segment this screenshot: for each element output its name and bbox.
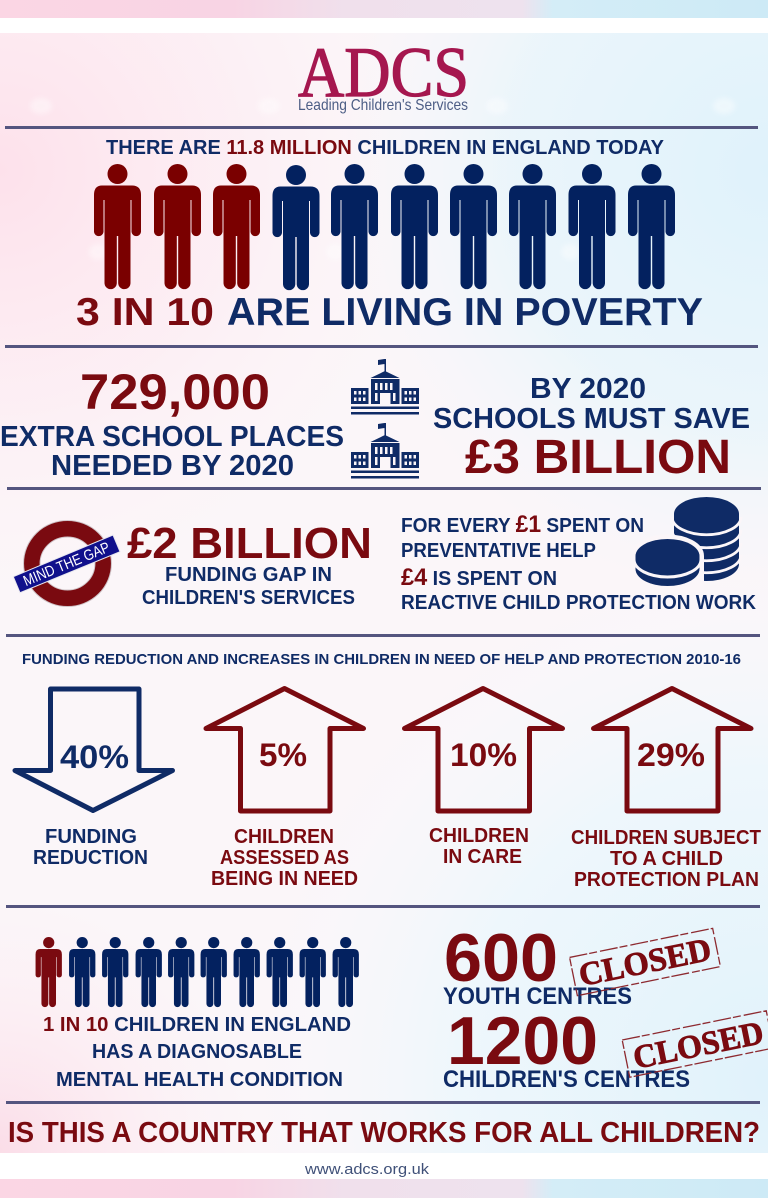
text: mental health: HAS A DIAGNOSABLE <box>92 1041 302 1063</box>
logo: ADCS: Leading Children's Services <box>298 97 468 114</box>
stat: 2 billion funding gap <box>127 519 372 609</box>
text: preventative vs reactive spend: PREVENTATIVE HELP <box>401 540 596 562</box>
text: preventative vs reactive spend: £4 IS SPENT ON <box>401 564 557 591</box>
stat: 1200 children's centres: CHILDREN'S CENTRES <box>443 1066 690 1093</box>
panel: children in care arrow <box>404 688 562 868</box>
logo: ADCS: ADCS <box>298 34 469 112</box>
website url: www.adcs.org.uk <box>304 1162 430 1178</box>
panel: funding reduction arrow: FUNDING <box>45 826 137 848</box>
stat: schools must save 3 billion: SCHOOLS MUST SAVE <box>433 403 750 435</box>
text: preventative vs reactive spend <box>401 511 757 614</box>
panel: children in care arrow: CHILDREN <box>429 825 529 847</box>
top decorative band <box>0 0 768 18</box>
stamp: closed youth centres: CLOSED <box>576 932 714 994</box>
panel: children in need arrow <box>206 688 364 890</box>
stat: 729,000 school places <box>0 364 344 482</box>
pictogram: 3 in 10 children <box>94 164 675 290</box>
text: mental health: 1 IN 10 CHILDREN IN ENGLAND <box>43 1014 351 1036</box>
panel: child protection plan arrow: 29% <box>637 737 705 773</box>
heading: funding reduction and increases: FUNDING REDUCTION AND INCREASES IN CHILDREN IN NEED OF HELP AND PROTECTION 2010-16 <box>22 651 741 668</box>
stat: schools must save 3 billion <box>433 373 750 484</box>
panel: child protection plan arrow: PROTECTION PLAN <box>574 869 759 891</box>
text: mental health <box>43 1014 351 1091</box>
stamp: closed children's centres: CLOSED <box>630 1015 767 1077</box>
stat: 1200 children's centres <box>443 1003 690 1093</box>
heading: 11.8 million children: THERE ARE 11.8 MILLION CHILDREN IN ENGLAND TODAY <box>106 137 665 159</box>
icon: mind the gap roundel: MIND THE GAP <box>21 539 112 590</box>
panel: child protection plan arrow <box>571 688 761 891</box>
panel: children in need arrow: CHILDREN <box>234 826 334 848</box>
stat: schools must save 3 billion: £3 BILLION <box>465 431 731 484</box>
stat: 600 youth centres <box>443 920 632 1010</box>
panel: child protection plan arrow: TO A CHILD <box>610 848 723 870</box>
panel: children in need arrow: BEING IN NEED <box>211 868 358 890</box>
panel: funding reduction arrow: 40% <box>60 739 129 775</box>
text: preventative vs reactive spend: FOR EVERY £1 SPENT ON <box>401 511 644 538</box>
stat: 729,000 school places: EXTRA SCHOOL PLACES <box>0 421 344 453</box>
icon: coin stacks <box>630 497 741 592</box>
panel: children in need arrow: 5% <box>259 737 307 773</box>
stat: 729,000 school places: 729,000 <box>80 364 270 420</box>
panel: funding reduction arrow: REDUCTION <box>33 847 148 869</box>
icon: school buildings <box>351 359 419 478</box>
panel: children in care arrow: IN CARE <box>443 846 522 868</box>
stat: 2 billion funding gap: £2 BILLION <box>127 519 372 568</box>
stat: schools must save 3 billion: BY 2020 <box>530 373 646 405</box>
stat: 2 billion funding gap: CHILDREN'S SERVICES <box>142 587 355 609</box>
stat: 600 youth centres: YOUTH CENTRES <box>443 983 632 1010</box>
stat: 1200 children's centres: 1200 <box>447 1003 598 1079</box>
panel: funding reduction arrow <box>15 689 172 869</box>
pictogram: 1 in 10 children <box>36 937 359 1007</box>
panel: child protection plan arrow: CHILDREN SUBJECT <box>571 827 761 849</box>
stat: 729,000 school places: NEEDED BY 2020 <box>51 450 294 482</box>
stat: 2 billion funding gap: FUNDING GAP IN <box>165 564 332 586</box>
text: mental health: MENTAL HEALTH CONDITION <box>56 1069 343 1091</box>
bottom decorative band <box>0 1179 768 1198</box>
text: preventative vs reactive spend: REACTIVE CHILD PROTECTION WORK <box>401 592 757 614</box>
panel: children in care arrow: 10% <box>450 737 517 773</box>
stat: 600 youth centres: 600 <box>444 920 558 996</box>
panel: children in need arrow: ASSESSED AS <box>220 847 349 869</box>
headline: 3 in 10 in poverty: ARE LIVING IN POVERTY <box>227 291 703 334</box>
headline: 3 in 10 in poverty: 3 IN 10 <box>76 291 214 334</box>
